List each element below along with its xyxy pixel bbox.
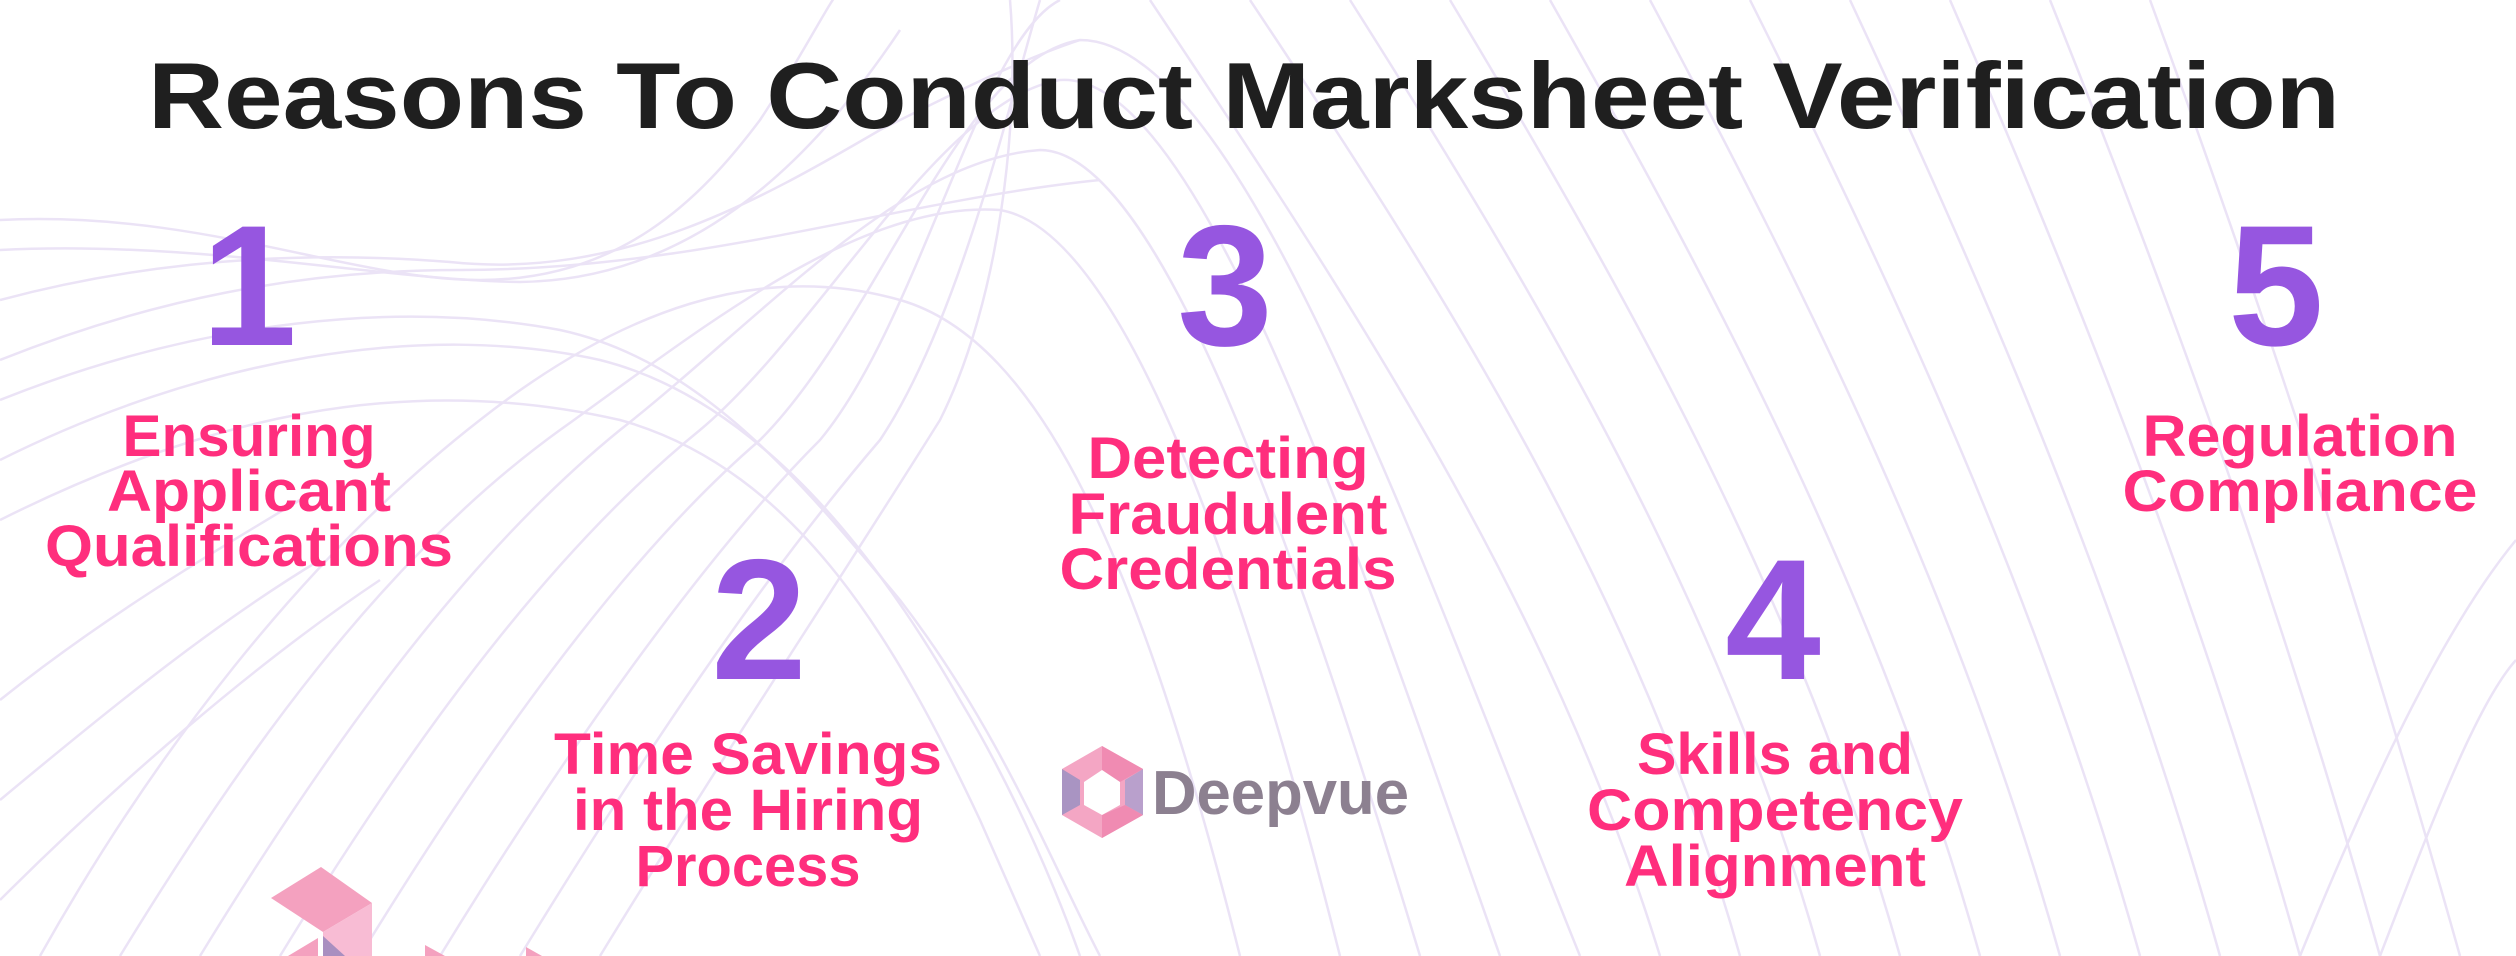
label 1: Applicant bbox=[107, 459, 391, 524]
label 2: in the Hiring bbox=[573, 778, 923, 843]
logo: Deepvue bbox=[1062, 746, 1409, 838]
number 4: 4 bbox=[1725, 524, 1821, 716]
item 5 bbox=[2122, 190, 2478, 524]
label 1: Qualifications bbox=[45, 514, 453, 579]
title: Reasons To Conduct Marksheet Verification bbox=[148, 43, 2340, 148]
label 4: Skills and bbox=[1637, 722, 1913, 787]
label 3: Fraudulent bbox=[1068, 482, 1388, 547]
number 2: 2 bbox=[711, 524, 807, 716]
item 4 bbox=[1587, 524, 1963, 899]
label 3 bbox=[1060, 426, 1396, 602]
icon: hexagon logo bbox=[1062, 746, 1143, 838]
label 1 bbox=[45, 404, 453, 579]
number 5: 5 bbox=[2228, 190, 2324, 382]
label 4 bbox=[1587, 722, 1963, 899]
label 2 bbox=[554, 722, 942, 899]
label 5: Regulation bbox=[2142, 404, 2458, 469]
label 4: Competency bbox=[1587, 778, 1963, 843]
decorative cube shapes bbox=[271, 867, 542, 956]
item 1 bbox=[45, 190, 453, 579]
label 5: Compliance bbox=[2122, 459, 2478, 524]
number 3: 3 bbox=[1177, 190, 1273, 382]
logo text: Deepvue bbox=[1152, 759, 1409, 828]
label 2: Time Savings bbox=[554, 722, 942, 787]
item 2 bbox=[554, 524, 942, 899]
label 3: Detecting bbox=[1088, 426, 1368, 491]
label 1: Ensuring bbox=[122, 404, 376, 469]
label 3: Credentials bbox=[1060, 537, 1396, 602]
number 1: 1 bbox=[201, 190, 297, 382]
label 2: Process bbox=[636, 834, 860, 899]
label 4: Alignment bbox=[1624, 834, 1926, 899]
label 5 bbox=[2122, 404, 2478, 524]
item 3 bbox=[1060, 190, 1396, 602]
